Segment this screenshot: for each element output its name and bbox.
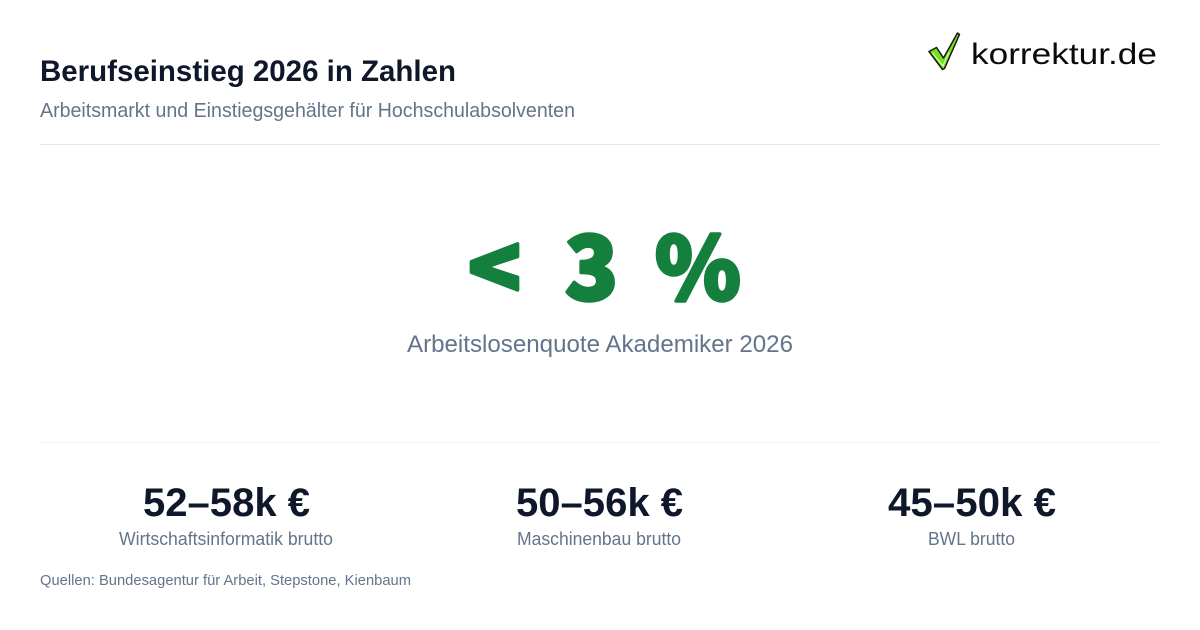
stat: BWL [888,481,1056,549]
main statistic: 3 [565,200,618,326]
stat label: BWL brutto [928,529,1015,549]
stat value: 50–56k € [516,481,683,525]
stat value: 52–58k € [143,481,310,525]
stat label: Wirtschaftsinformatik brutto [119,529,333,549]
stat: Wirtschaftsinformatik [119,481,333,549]
title: Berufseinstieg 2026 in Zahlen [40,55,456,88]
source note: Quellen: Bundesagentur für Arbeit, Stepstone, Kienbaum [40,572,411,589]
main statistic: < [468,200,521,326]
main statistic label: Arbeitslosenquote Akademiker 2026 [407,331,793,358]
stat: Maschinenbau [516,481,683,549]
icon: green check mark [929,33,960,70]
stat value: 45–50k € [888,481,1056,525]
main statistic: % [655,200,741,326]
subtitle: Arbeitsmarkt und Einstiegsgehälter für Hochschulabsolventen [40,100,575,122]
logo: korrektur.de [929,33,1157,71]
stat label: Maschinenbau brutto [517,529,681,549]
logo wordmark: korrektur.de [971,38,1157,71]
